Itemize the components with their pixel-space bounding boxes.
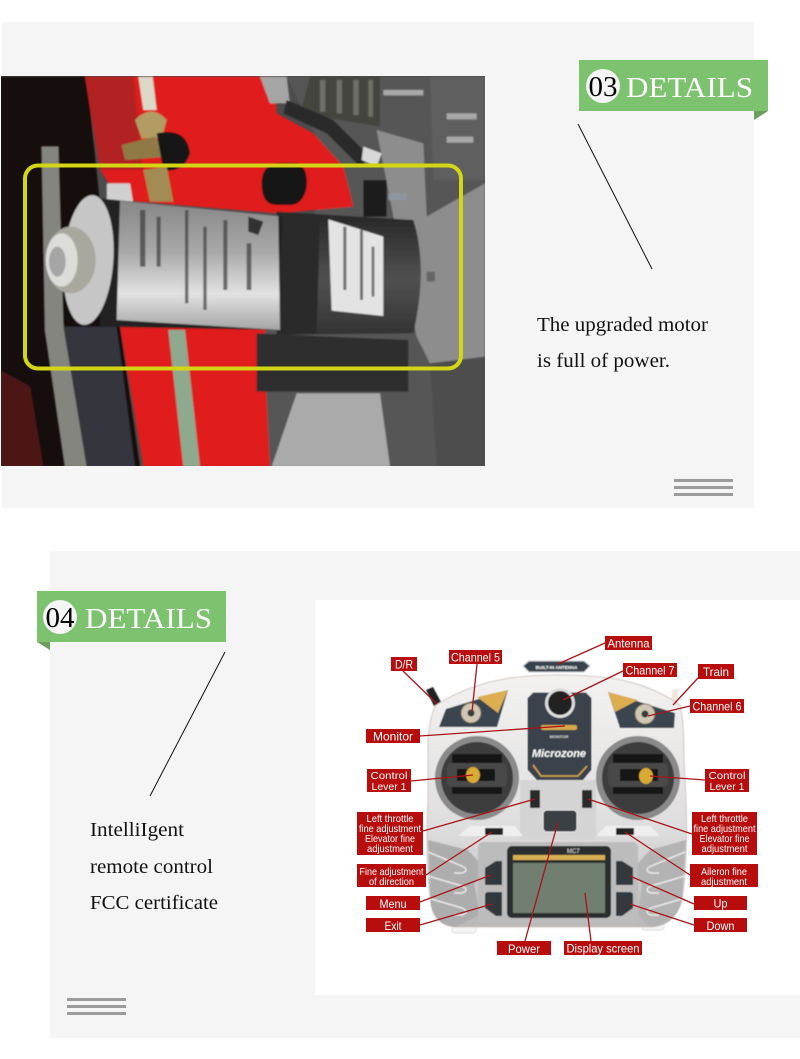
label: aileron fine adjustment: adjustment (701, 876, 747, 888)
banner: 04 DETAILS (37, 591, 226, 650)
feet (452, 915, 476, 933)
label: Down (694, 918, 747, 933)
illustration: remote transmitter: BUILT-IN ANTENNA (536, 665, 578, 670)
label: aileron fine adjustment: Aileron fine (701, 866, 747, 878)
left switch panel (439, 690, 508, 727)
label: D/R: D/R (395, 658, 413, 672)
label: Channel 5: Channel 5 (451, 650, 500, 664)
text: motor caption (537, 314, 708, 372)
lower centre trims (520, 780, 596, 840)
label: left throttle fine adjustment, right (692, 812, 757, 855)
label: Control Lever 1 right: Lever 1 (710, 781, 745, 793)
centre lower plate (478, 842, 638, 923)
label: left throttle fine adjustment, right: Elevator fine (700, 833, 750, 845)
label: left throttle fine adjustment, right: adjustment (702, 843, 748, 855)
label: Channel 7: Channel 7 (626, 664, 675, 678)
highlight box (25, 166, 461, 368)
label: Exit (366, 918, 420, 933)
text: motor caption: The upgraded motor (537, 314, 708, 336)
left gimbal (435, 736, 519, 820)
label: Menu (366, 896, 420, 911)
body (427, 675, 686, 927)
label: left throttle fine adjustment, left: Left throttle (366, 813, 414, 825)
label: Control Lever 1 right: Control (708, 770, 746, 782)
text: remote caption: FCC certificate (90, 892, 218, 914)
label: left throttle fine adjustment, left: Elevator fine (365, 833, 415, 845)
label: Control Lever 1 left: Control (370, 770, 408, 782)
label: fine adjustment of direction: of direction (369, 876, 414, 888)
label: aileron fine adjustment (690, 864, 758, 888)
text: remote caption (90, 819, 218, 914)
banner: 03 DETAILS: 03 (588, 71, 618, 103)
label: Power (497, 941, 551, 956)
grips (428, 840, 486, 927)
label: Channel 6: Channel 6 (692, 700, 742, 714)
toggle D/R (426, 687, 441, 706)
label: Monitor: Monitor (373, 730, 413, 744)
label: Control Lever 1 right (705, 769, 749, 793)
illustration: remote transmitter (426, 661, 686, 933)
display (507, 846, 611, 918)
label: Antenna: Antenna (608, 636, 650, 650)
label: Train (698, 664, 734, 679)
label: fine adjustment of direction (357, 864, 426, 888)
label: left throttle fine adjustment, left (357, 812, 423, 855)
side buttons (485, 861, 502, 885)
label: Down: Down (706, 919, 734, 933)
banner: 04 DETAILS: 04 (46, 602, 75, 634)
leader line 04 (150, 652, 225, 796)
illustration: remote transmitter: MONITOR (550, 734, 569, 739)
label: Up (694, 896, 747, 910)
top antenna chip (523, 661, 590, 672)
banner: 03 DETAILS (579, 60, 768, 120)
right gimbal (596, 736, 680, 820)
label: Control Lever 1 left (367, 769, 411, 793)
label: left throttle fine adjustment, right: Left throttle (701, 813, 748, 825)
label: Train: Train (703, 665, 729, 679)
lower side trims (458, 826, 523, 836)
text: remote caption: remote control (90, 856, 213, 878)
panel: white transmitter card (315, 600, 800, 995)
toggle train (671, 688, 679, 706)
photo: upgraded motor (0, 76, 485, 467)
illustration: remote transmitter: Microzone (532, 748, 586, 760)
icon: three bars 04 (67, 998, 126, 1015)
label: fine adjustment of direction: Fine adjustment (360, 866, 424, 878)
label: Exit: Exit (384, 919, 402, 933)
banner: 03 DETAILS: DETAILS (626, 72, 753, 104)
text: remote caption: IntelliIgent (90, 819, 184, 841)
label: Up: Up (714, 896, 728, 910)
label: left throttle fine adjustment, right: fine adjustment (694, 823, 756, 835)
leader line 03 (578, 124, 652, 269)
label: Power: Power (508, 942, 540, 956)
illustration: remote transmitter: MC7 (567, 849, 580, 855)
icon: three bars 03 (674, 479, 733, 496)
center dark panel (527, 692, 592, 781)
text: motor caption: is full of power. (537, 350, 670, 372)
panel: details 04 (50, 551, 800, 1038)
label: Display screen: Display screen (566, 942, 640, 956)
right switch panel (608, 692, 675, 728)
banner: 04 DETAILS: DETAILS (85, 603, 212, 635)
panel: details 03 (2, 22, 754, 508)
label: Control Lever 1 left: Lever 1 (372, 781, 407, 793)
label: Menu: Menu (380, 897, 406, 911)
label: left throttle fine adjustment, left: fine adjustment (359, 823, 421, 835)
label: left throttle fine adjustment, left: adjustment (367, 843, 413, 855)
leader lines: transmitter callouts (403, 643, 705, 941)
